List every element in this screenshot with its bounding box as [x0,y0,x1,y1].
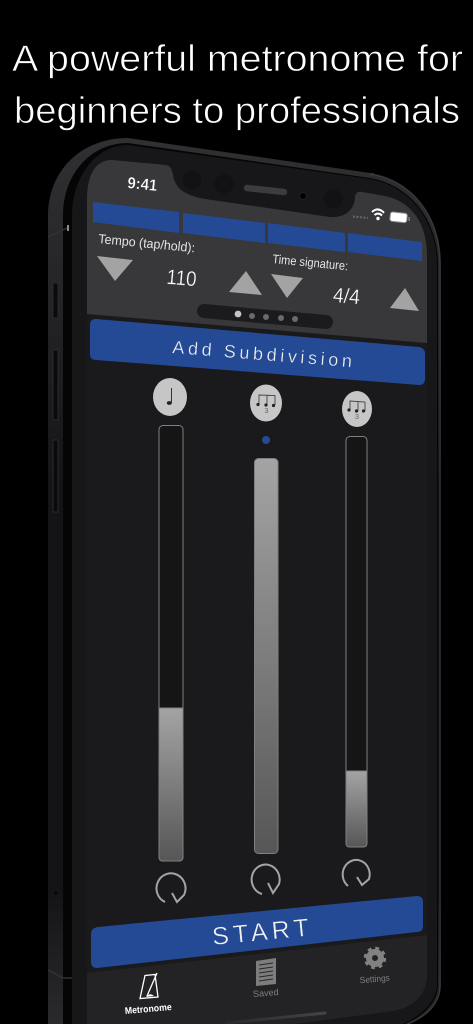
subdivision icon: triplet right [342,391,372,427]
title [12,37,463,131]
slider 2 [254,458,278,854]
subdivision icon: quarter note [153,378,187,416]
tab bar panel [87,935,427,1024]
title: beginners to professionals [14,89,460,131]
page indicator [204,311,326,322]
repeat dial 3 [343,860,370,886]
tempo control: 110 [166,266,198,291]
beat bars [93,202,422,261]
add subdivision button [90,319,425,385]
status icons [353,209,410,223]
repeat dial 2 [252,865,280,894]
repeat dial 1 [157,873,186,902]
slider 3 [346,436,367,847]
start button: START [211,914,310,951]
time signature control: 4/4 [332,284,361,309]
tab: metronome [124,973,172,1017]
subdivision icon: triplet [250,384,282,422]
home indicator [227,1013,325,1023]
phone screen [87,160,427,1024]
tab: metronome: Metronome [124,1002,172,1017]
title: A powerful metronome for [12,37,463,79]
status time: 9:41 [127,175,158,195]
subdivision icon: triplet: 3 [264,406,269,415]
notch details [182,170,342,208]
tab: saved: Saved [253,987,279,999]
tempo control: Tempo (tap/hold): [98,231,196,255]
subdivision icon: triplet right: 3 [355,412,359,421]
tab: saved [253,958,279,999]
tempo control [97,231,262,295]
time signature control [271,252,419,311]
start button [91,896,423,968]
header panel [87,160,427,343]
phone body [48,138,441,1024]
tab: settings [359,948,391,985]
add subdivision button: Add Subdivision [172,337,353,371]
time signature control: Time signature: [272,252,349,273]
tab: settings: Settings [359,973,391,985]
slider 1 [159,426,183,861]
active beat dot [262,436,270,444]
